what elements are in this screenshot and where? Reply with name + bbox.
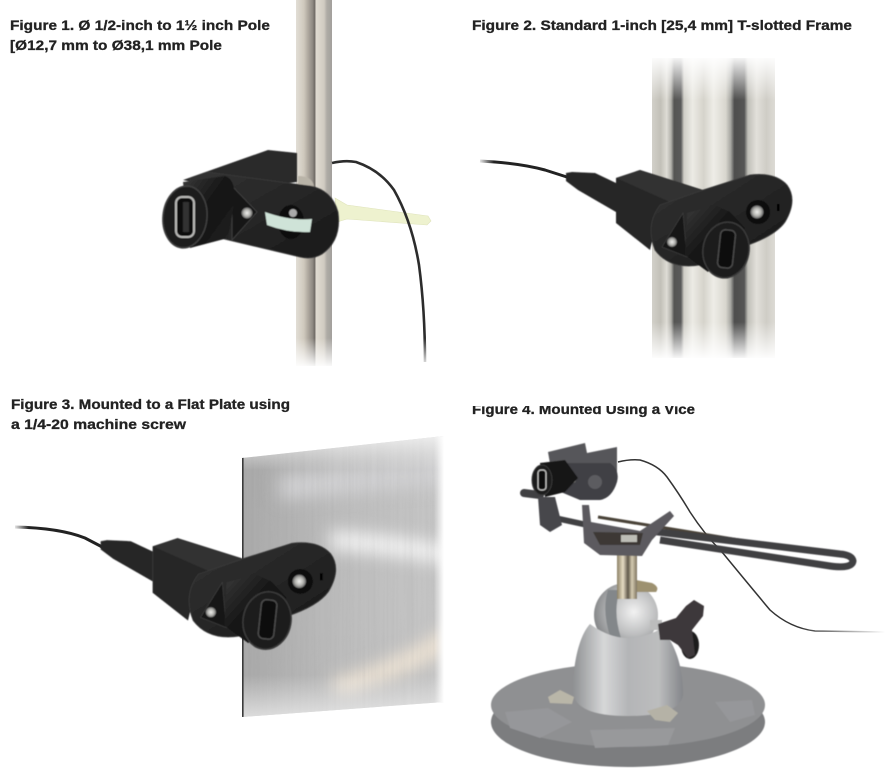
connector barrel bbox=[685, 205, 745, 272]
mounting screw bbox=[289, 209, 297, 217]
heading: figure 3: a 1/4-20 machine screw bbox=[11, 416, 186, 432]
mount with connector bbox=[566, 170, 792, 282]
bracket plate bbox=[651, 174, 792, 266]
small slot bbox=[320, 573, 323, 580]
connector barrel bbox=[183, 176, 235, 248]
cable bbox=[332, 161, 425, 362]
moving jaw bbox=[538, 497, 562, 532]
panel: figure 1 pole mount bbox=[10, 0, 435, 368]
base recess right bbox=[715, 700, 755, 722]
bracket opening bbox=[593, 532, 643, 545]
mount with connector bbox=[101, 538, 336, 653]
base recess front bbox=[590, 728, 675, 748]
mounting hole bbox=[278, 205, 304, 239]
connector pins bbox=[183, 202, 189, 232]
cable left fade bbox=[13, 520, 29, 534]
bracket block bbox=[616, 170, 703, 250]
heading: figure 3 bbox=[11, 396, 290, 432]
ball joint bbox=[594, 583, 658, 647]
connector slot bbox=[176, 197, 194, 237]
foot tab left bbox=[548, 690, 574, 704]
mounting screw bbox=[750, 206, 764, 218]
base recess left bbox=[505, 708, 572, 738]
locking knob bbox=[658, 600, 704, 658]
post bbox=[617, 553, 637, 599]
bracket block bbox=[153, 538, 243, 620]
plate top fade bbox=[244, 436, 442, 466]
connector face bbox=[160, 184, 210, 250]
plate dark left edge bbox=[242, 456, 244, 718]
dome bbox=[573, 624, 683, 716]
light reflection bands bbox=[330, 530, 450, 565]
heading: figure 1 bbox=[10, 17, 270, 53]
heading: figure 2: Figure 2. Standard 1-inch [25,4 mm] T-slotted Frame bbox=[472, 17, 852, 33]
bracket top lit face bbox=[153, 538, 243, 572]
brushed texture bbox=[242, 436, 444, 718]
plate base bbox=[242, 436, 444, 718]
lower bar with U bend bbox=[650, 531, 853, 567]
mounting screw bbox=[293, 575, 306, 588]
plate bottom fade bbox=[244, 682, 440, 717]
frame top fade bbox=[645, 55, 781, 100]
bracket front plate bbox=[190, 172, 339, 258]
connector face bbox=[238, 588, 296, 653]
green strap bbox=[265, 212, 312, 232]
heading: figure 1: [Ø12,7 mm to Ø38,1 mm Pole bbox=[10, 37, 222, 53]
device plate bbox=[556, 463, 618, 500]
bracket plate bbox=[189, 543, 336, 637]
bracket back block bbox=[183, 150, 297, 190]
heading: figure 3: Figure 3. Mounted to a Flat Plate using bbox=[11, 396, 290, 412]
mounting hole bbox=[288, 569, 313, 594]
frame bottom fade bbox=[645, 322, 781, 360]
connector slot bbox=[258, 599, 277, 640]
base rim bbox=[491, 677, 765, 767]
knob rear shadow bbox=[681, 631, 699, 659]
bracket top lit face bbox=[616, 170, 703, 203]
bracket nut bbox=[621, 535, 637, 542]
cable bbox=[15, 527, 108, 550]
rear bracket bbox=[548, 443, 617, 490]
foot tab right bbox=[647, 705, 678, 722]
small slot bbox=[777, 204, 780, 211]
left bar bbox=[555, 518, 592, 526]
plate right fade bbox=[436, 436, 444, 702]
base top surface bbox=[491, 663, 765, 747]
aluminium frame bbox=[652, 58, 775, 358]
beige reflection band bbox=[330, 625, 450, 695]
brushed steel plate bbox=[242, 436, 450, 718]
cable bbox=[480, 161, 570, 178]
flange screw bbox=[242, 208, 252, 218]
cable right fade bbox=[800, 622, 885, 636]
connector face bbox=[698, 218, 754, 282]
flange screw bbox=[570, 477, 576, 483]
jaw bracket bbox=[582, 505, 674, 556]
triangular connector flange bbox=[232, 186, 257, 240]
flange screw bbox=[667, 237, 677, 247]
threaded rod bbox=[598, 517, 776, 546]
connector barrel bbox=[540, 460, 578, 497]
panel: figure 3 flat plate bbox=[11, 396, 450, 718]
heading: figure 4 (top clipped): Figure 4. Mounted Using a Vice bbox=[472, 401, 695, 417]
connector barrel bbox=[224, 574, 287, 643]
triangular flange bbox=[662, 213, 687, 257]
connector slot bbox=[717, 229, 736, 269]
triangular flange bbox=[200, 582, 226, 628]
panel: figure 4 vice mount bbox=[472, 401, 885, 767]
connector slot bbox=[538, 470, 546, 490]
strain relief bbox=[101, 540, 153, 581]
upper light band bbox=[280, 460, 450, 500]
connector face bbox=[532, 465, 552, 495]
mounting hole bbox=[746, 200, 770, 224]
pole and cable bottom fade bbox=[290, 338, 435, 368]
strain relief bbox=[566, 172, 616, 212]
mount bracket bbox=[160, 150, 339, 258]
flange screw bbox=[206, 607, 216, 617]
knob stem bbox=[650, 620, 662, 630]
ball groove bbox=[605, 590, 622, 642]
metal pole bbox=[296, 0, 332, 366]
device mount screw bbox=[588, 475, 602, 489]
pole highlight in slot bbox=[298, 176, 314, 186]
zip tie tail bbox=[335, 198, 431, 225]
vice base bbox=[491, 553, 765, 767]
cable left fade bbox=[478, 155, 494, 169]
panel: figure 2 t-slotted frame bbox=[472, 17, 852, 360]
cable bbox=[618, 460, 885, 632]
rod stub bbox=[524, 493, 540, 495]
vice clamp bbox=[524, 443, 853, 567]
heading: figure 1: Figure 1. Ø 1/2-inch to 1½ inch Pole bbox=[10, 17, 270, 33]
side pin bbox=[636, 580, 657, 592]
